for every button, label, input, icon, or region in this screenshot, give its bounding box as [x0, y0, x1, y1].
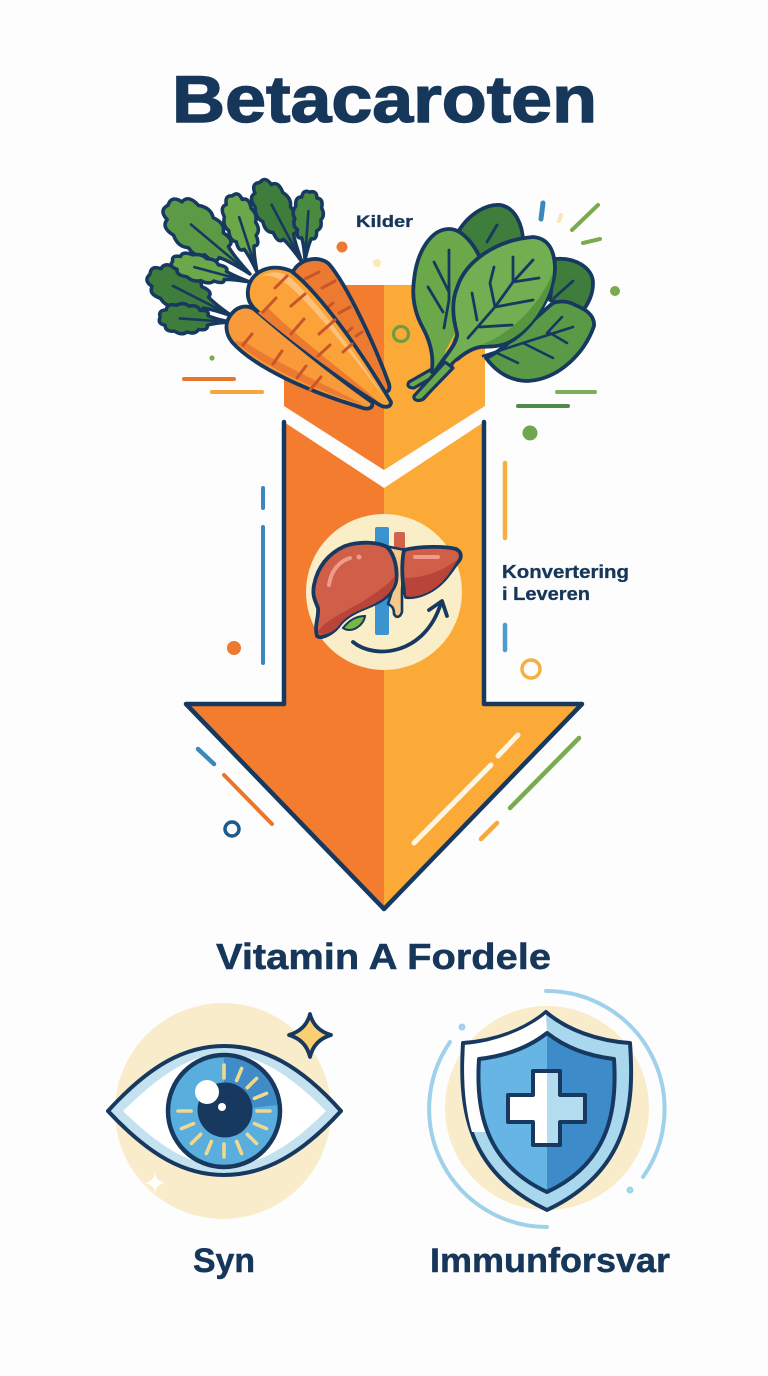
- liver badge circle: [306, 514, 462, 670]
- shield outer: [462, 1012, 631, 1210]
- sparkle star: [289, 1014, 331, 1057]
- medical cross: [508, 1071, 585, 1145]
- conversion arrow: [353, 601, 447, 651]
- icon: eye: [108, 1003, 341, 1219]
- carrot greens: [140, 173, 325, 337]
- icon: carrots: [140, 173, 391, 409]
- spinach back leaves: [458, 205, 594, 381]
- spinach orange gap lower: [453, 351, 478, 365]
- icon: shield: [429, 991, 665, 1227]
- carrot middle: [248, 268, 391, 407]
- carrot back: [293, 259, 389, 392]
- liver connector: [385, 546, 405, 617]
- label: Kilder: Kilder: [356, 212, 413, 231]
- eye backdrop circle: [115, 1003, 331, 1219]
- iris: [168, 1055, 280, 1167]
- label: Immunforsvar: Immunforsvar: [430, 1242, 670, 1280]
- icon: liver conversion: [306, 514, 462, 670]
- protective ring arcs: [429, 991, 665, 1227]
- blood vessels: [375, 527, 405, 635]
- liver left lobe: [402, 547, 461, 597]
- label: Konvertering i Leveren: i Leveren: [502, 583, 590, 604]
- decorations: source accents: [184, 203, 620, 440]
- gallbladder: [343, 616, 365, 630]
- spinach orange gaps: [444, 331, 456, 356]
- shield backdrop circle: [445, 1006, 649, 1210]
- label: Konvertering i Leveren: Konvertering: [502, 561, 629, 582]
- title: Betacaroten: [172, 62, 597, 136]
- shield inner: [478, 1033, 615, 1192]
- arrow shine lines: [414, 735, 518, 843]
- arrow shaft and head: [186, 422, 582, 909]
- heading: Vitamin A Fordele: Vitamin A Fordele: [216, 936, 551, 977]
- carrot front: [226, 307, 372, 409]
- label: Syn: Syn: [193, 1242, 255, 1280]
- spinach main leaf: [417, 237, 555, 400]
- liver right lobe: [313, 543, 397, 637]
- decorations: side accents: [198, 463, 579, 839]
- label: Konvertering i Leveren: [502, 561, 629, 604]
- icon: spinach: [408, 205, 594, 400]
- spinach left leaf: [413, 229, 480, 385]
- eye shape: [108, 1046, 341, 1175]
- process arrow: [186, 285, 582, 909]
- small white sparkle: [145, 1172, 165, 1194]
- spinach stems: [408, 362, 453, 400]
- arrow top band: [284, 285, 485, 470]
